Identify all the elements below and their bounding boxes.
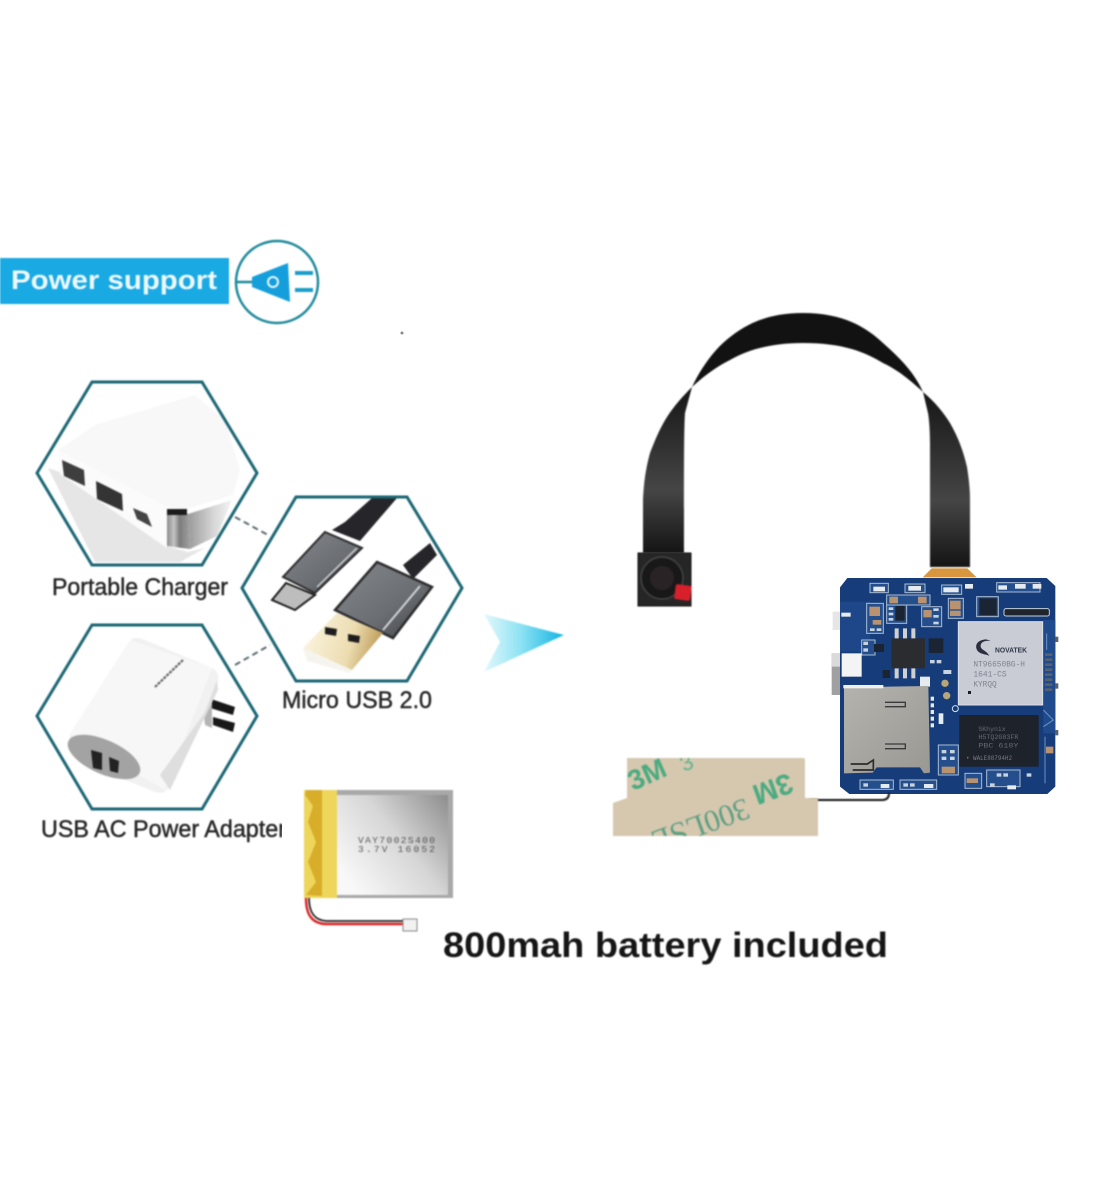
prongs: [207, 698, 235, 715]
micro usb cable: [332, 498, 397, 541]
ribbon top arc: [692, 313, 923, 392]
memory chip: [959, 715, 1039, 767]
tape markings: 3M: [623, 752, 671, 796]
antenna wire: [810, 793, 889, 800]
circuit board: KYRQQ: [973, 680, 997, 689]
trace lines: [1043, 633, 1053, 783]
circuit board: • WALE88794H2: [966, 755, 1012, 762]
tan capacitors: [869, 597, 1053, 783]
left side usb tabs: [833, 612, 841, 630]
battery: 3.7V 16052: [358, 844, 435, 855]
hexagon frame: [37, 625, 257, 809]
power bank front: [58, 450, 167, 548]
tape markings: [626, 757, 794, 837]
power bank top: [58, 395, 240, 509]
circuit board: PBC 618Y: [978, 742, 1019, 749]
circuit board: SKhynix: [978, 725, 1006, 733]
ribbon left strip: [643, 387, 692, 553]
label: Micro USB 2.0: Micro USB 2.0: [282, 687, 432, 714]
crystal: [1004, 609, 1049, 616]
label: Portable Charger: Portable Charger: [52, 574, 228, 601]
micro usb tip: [272, 583, 315, 610]
circuit board: H5TQ2G83FR: [978, 734, 1019, 741]
battery: [304, 790, 453, 931]
circuit board: 1641-CS: [973, 671, 1007, 680]
camera module: [638, 553, 692, 606]
small chip: [892, 638, 925, 668]
usb a cable: [403, 543, 437, 579]
circuit board: [832, 568, 1058, 794]
battery silver body: [335, 790, 453, 898]
adapter logo: [155, 660, 183, 687]
silver side: [188, 500, 232, 549]
adapter front face: [61, 726, 147, 788]
footprint outlines: [860, 583, 1040, 789]
silver corner: [167, 513, 190, 549]
adapter body: [70, 638, 218, 793]
tape markings: 3: [676, 749, 697, 777]
banner: Power support: [0, 258, 229, 304]
circuit board: NOVATEK: [995, 645, 1028, 654]
tape markings: 300LSE: [647, 791, 755, 859]
tape markings: 3M: [748, 766, 797, 810]
usb ports: [62, 460, 85, 486]
arrow: [484, 614, 564, 672]
usb connector overlay: [842, 653, 862, 677]
banner heading: Power support: [11, 265, 217, 295]
panel: usb ac adapter: [37, 625, 257, 809]
hexagon frame: [37, 382, 257, 565]
usb a shell: [335, 562, 432, 638]
stray dot: [400, 332, 404, 334]
label: 800mah battery included: 800mah battery included: [443, 926, 888, 965]
red tab: [674, 584, 692, 601]
chip markings: NT96650BG-H: [973, 661, 1025, 670]
battery plug: [403, 919, 417, 931]
lens: [641, 557, 683, 599]
dark ics: [874, 598, 997, 678]
panel: micro usb cable: [242, 497, 462, 681]
flex ribbon cable: [643, 313, 970, 567]
label: USB AC Power Adapter: USB AC Power Adapter: [41, 816, 286, 843]
flex connector: [923, 568, 977, 577]
battery wires: [306, 898, 403, 924]
hexagon frame: [242, 497, 462, 681]
ribbon right strip: [923, 392, 970, 567]
pads near main chip: [941, 680, 949, 687]
pcb: [840, 578, 1055, 794]
3m adhesive tape: [612, 757, 819, 837]
novatek logo: [976, 639, 991, 656]
novatek chip: [958, 622, 1043, 705]
panel: portable charger: [37, 382, 257, 565]
dashed connector bottom: [235, 645, 270, 665]
usb a plug: [303, 613, 383, 670]
white smd pads: [841, 584, 1041, 789]
dashed connector top: [235, 517, 268, 535]
sd card slot: [844, 686, 930, 773]
battery gold tape: [304, 790, 337, 898]
right edge pads: [1045, 637, 1058, 735]
power bank shadow: [48, 468, 205, 562]
battery print: VAY7002S400: [358, 835, 435, 846]
small footprints: [863, 607, 1031, 787]
micro usb shell: [283, 532, 362, 593]
icon: power plug: [236, 241, 318, 323]
